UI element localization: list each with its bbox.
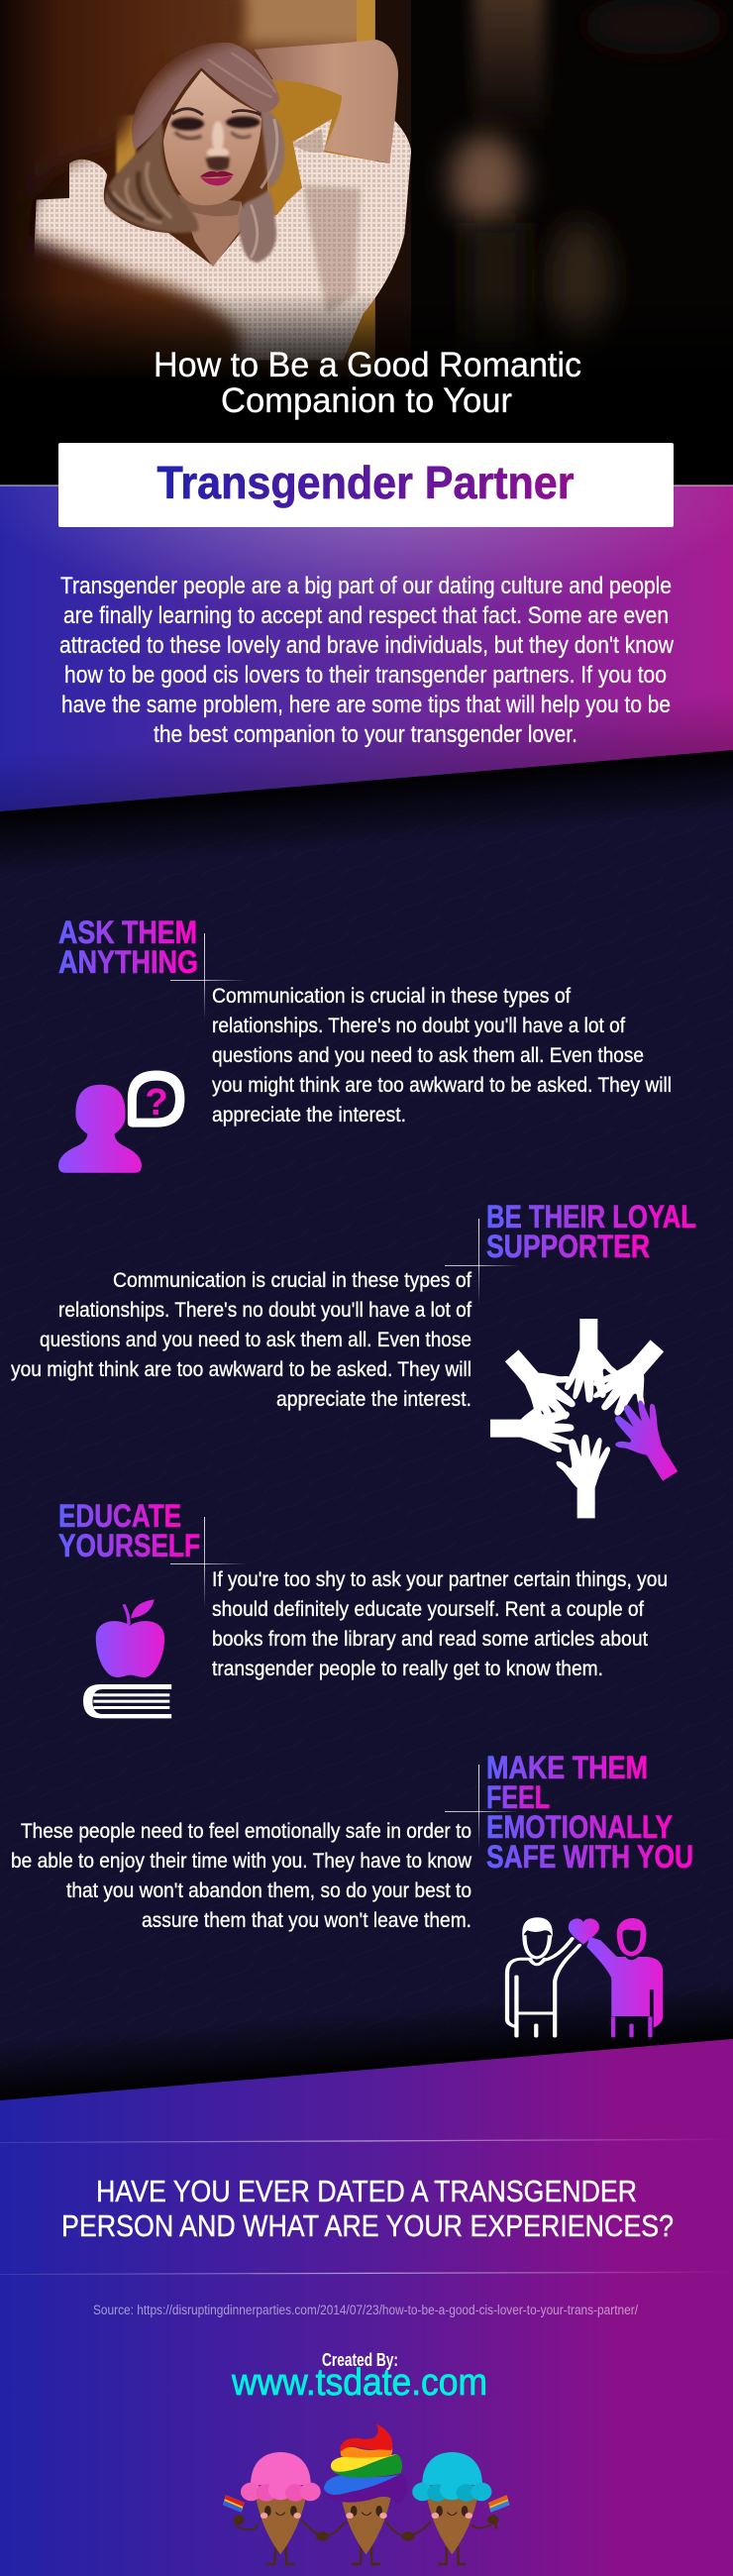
body text: Communication is crucial in these types of [212,985,571,1008]
right blurred backdrop [375,0,729,355]
body text [212,985,672,1127]
legs [274,2546,458,2563]
upper hair [132,43,279,151]
robe fold shading [304,185,360,314]
nose [205,121,230,170]
body text [11,1820,472,1932]
body text: books from the library and read some articles about [212,1628,648,1651]
left warm backdrop [26,0,375,376]
neck [178,195,246,267]
heading [58,1498,200,1563]
title banner: Transgender Partner [157,457,575,508]
panel: outro [0,2039,733,2576]
flags and arms [223,2495,509,2541]
intro paragraph [59,573,675,748]
heading [486,1750,693,1875]
shadow under intro diagonal [0,750,733,923]
face [163,71,262,205]
intro paragraph: how to be good cis lovers to their transgender partners. If you too [64,662,667,689]
body text: questions and you need to ask them all. Even those [40,1329,471,1351]
heading: ANYTHING [58,944,198,980]
body text: relationships. There's no doubt you'll have a lot of [212,1015,625,1037]
right cone [412,2452,491,2554]
closing question [61,2174,674,2243]
created by: Created By: [322,2350,398,2370]
brown vignette mask [14,0,251,361]
section: make them feel emotionally safe [11,1750,693,2036]
section: educate yourself [58,1498,668,1718]
right eye [226,111,261,138]
closing question: HAVE YOU EVER DATED A TRANSGENDER [96,2174,637,2208]
dark section texture [0,753,733,2100]
body text: assure them that you won't leave them. [142,1909,471,1932]
robe [30,119,411,360]
heading: SUPPORTER [486,1229,650,1264]
title: How to Be a Good Romantic [154,346,581,384]
left eye [171,109,204,139]
icon: apple on book [83,1599,171,1718]
hero bottom fade [0,295,606,380]
body text: transgender people to really get to know them. [212,1658,603,1680]
source: Source: https://disruptingdinnerparties.com/2014/07/23/how-to-be-a-good-cis-lover-to-your-trans-partner/ [93,2303,638,2317]
hair left curls [105,119,198,233]
title: Companion to Your [221,381,512,420]
icon: ice cream trio [223,2424,509,2565]
icon: person with question bubble: ? [145,1082,168,1124]
icon: couple with heart [507,1917,663,2036]
heading: EMOTIONALLY [486,1809,673,1845]
body text: appreciate the interest. [276,1388,471,1411]
heading: EDUCATE [58,1498,181,1534]
heading: ASK THEM [58,914,197,950]
body text: If you're too shy to ask your partner certain things, you [212,1568,668,1591]
raised arm [255,40,398,163]
heading: FEEL [486,1779,550,1815]
golden wall [267,79,374,218]
hero photo [0,0,733,489]
body text: should definitely educate yourself. Rent a couple of [212,1598,644,1621]
left cone [241,2452,321,2554]
section: ask them anything [58,914,672,1173]
icon: circle of hands [490,1319,690,1518]
heading: SAFE WITH YOU [486,1839,693,1875]
body text: you might think are too awkward to be asked. They will [212,1074,672,1097]
section: be their loyal supporter [11,1199,696,1518]
middle rainbow cone [324,2424,408,2554]
body text: relationships. There's no doubt you'll have a lot of [58,1299,471,1322]
hair right waves [239,109,284,263]
website: www.tsdate.com [231,2362,487,2404]
title [154,346,581,420]
heading: YOURSELF [58,1528,200,1563]
woman figure [30,0,411,383]
title banner [58,443,674,527]
body text: These people need to feel emotionally safe in order to [21,1820,471,1843]
heading [486,1199,696,1264]
body text: appreciate the interest. [212,1104,406,1127]
body text [11,1269,471,1411]
icon: person with question bubble [58,1070,184,1173]
heading: MAKE THEM [486,1750,648,1785]
intro paragraph: the best companion to your transgender lover. [154,721,577,748]
panel: intro [0,485,733,811]
body text: questions and you need to ask them all. Even those [212,1044,644,1067]
shadow above outro diagonal [0,1932,733,2100]
body text: that you won't abandon them, so do your best to [66,1879,471,1902]
body text: Communication is crucial in these types of [113,1269,471,1292]
body text: be able to enjoy their time with you. They have to know [11,1850,472,1873]
lips [200,171,234,185]
heading [58,914,198,980]
body text [212,1568,668,1680]
body text: you might think are too awkward to be asked. They will [11,1358,471,1381]
